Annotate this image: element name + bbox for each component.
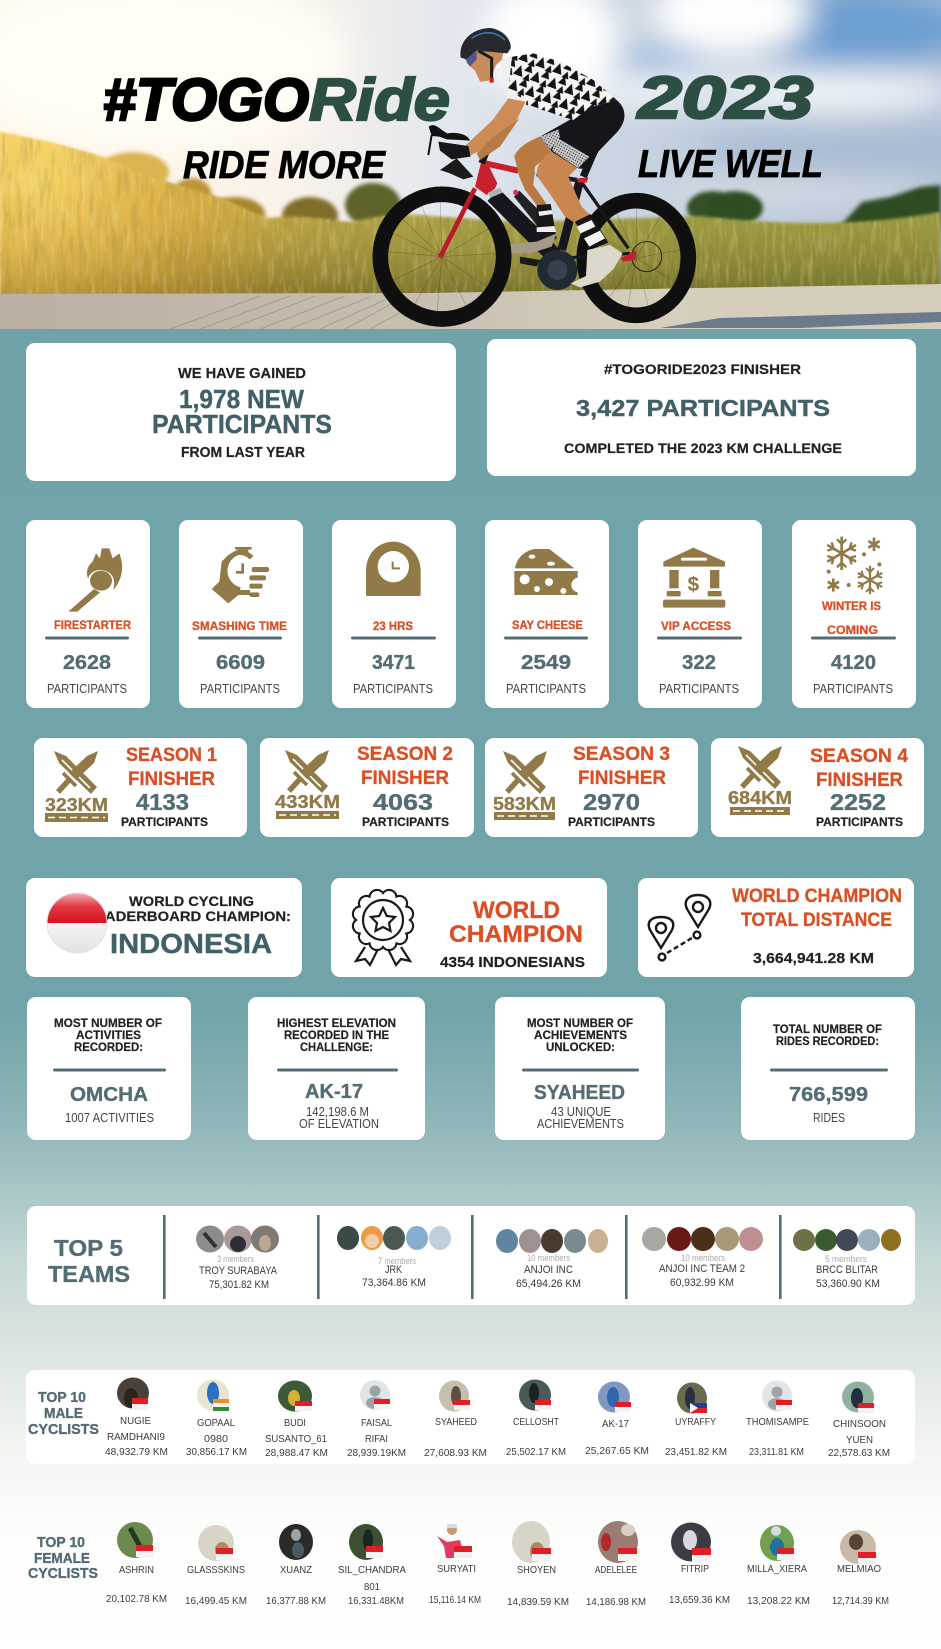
cyclist: suryati: SURYATI — [437, 1563, 476, 1575]
heading: SEASON 1 — [126, 744, 217, 766]
tagline: live well: LIVE WELL — [638, 143, 823, 186]
number: 4063 — [373, 789, 433, 815]
stat: 4354 indonesians: 4354 INDONESIANS — [440, 955, 585, 971]
heading — [810, 745, 908, 791]
title: 2023: 2023 — [637, 65, 813, 131]
heading: MOST NUMBER OF — [54, 1016, 162, 1030]
cyclist: budi susanto_61 — [265, 1380, 328, 1459]
panel: season 2 finisher — [260, 738, 474, 837]
cyclist: glassskins — [185, 1525, 247, 1607]
caption: PARTICIPANTS — [816, 815, 903, 829]
heading — [48, 1235, 130, 1287]
heading: FINISHER — [816, 769, 903, 791]
bottle — [514, 191, 545, 225]
heading: CYCLISTS — [28, 1566, 98, 1582]
heading — [28, 1390, 99, 1438]
cyclist: melmiao — [832, 1530, 889, 1607]
cyclist: milla_xiera — [747, 1525, 810, 1607]
number: 4120 — [831, 651, 876, 674]
crank — [537, 250, 577, 290]
panel: world champion total distance — [638, 878, 914, 977]
caption: PARTICIPANTS — [568, 815, 655, 829]
stat: 3,427 participants: 3,427 PARTICIPANTS — [576, 395, 830, 421]
label — [822, 599, 881, 637]
text: finisher heading: #TOGORIDE2023 FINISHER — [604, 361, 801, 377]
cyclist: thomisampe: THOMISAMPE — [746, 1416, 809, 1428]
heading: SEASON 4 — [810, 745, 908, 767]
heading: SEASON 2 — [357, 743, 453, 765]
panel: hero photo banner — [0, 0, 941, 329]
title: #TOGORide: #TOGO — [103, 67, 309, 133]
stat: omcha: OMCHA — [70, 1084, 148, 1106]
stat: 1,978 new participants: PARTICIPANTS — [152, 411, 332, 439]
cyclist: ashrin: 20,102.78 KM — [106, 1593, 167, 1605]
heading: TOP 10 — [38, 1390, 86, 1406]
caption — [299, 1105, 379, 1131]
cyclist: budi susanto_61: BUDI — [284, 1417, 306, 1429]
cyclist: gopaal 0980: 0980 — [204, 1433, 228, 1445]
team: troy surabaya: TROY SURABAYA — [199, 1265, 278, 1277]
icon: swords and road 323km: 323KM — [45, 795, 108, 815]
cyclist: suryati: 15,116.14 KM — [429, 1594, 481, 1606]
panel: season 4 finisher — [711, 738, 924, 837]
icon: swords and road 433km — [275, 750, 340, 819]
caption: RIDES — [813, 1111, 845, 1125]
cyclist: faisal rifai: 28,939.19KM — [347, 1447, 406, 1459]
cyclist: ashrin: ASHRIN — [119, 1564, 154, 1576]
cyclist: budi susanto_61: SUSANTO_61 — [265, 1433, 327, 1445]
stat: 1,978 new participants: 1,978 NEW — [179, 386, 305, 414]
number: 6609 — [216, 651, 265, 674]
team: jrk: JRK — [385, 1264, 403, 1276]
cyclist: faisal rifai: RIFAI — [365, 1433, 388, 1445]
label: COMING — [827, 623, 878, 637]
cyclist: nugie ramdhani9 — [105, 1378, 168, 1458]
cyclist: sil_chandra801: 801 — [364, 1581, 380, 1593]
team: brcc blitar: 53,360.90 KM — [816, 1278, 880, 1290]
label: WINTER IS — [822, 599, 881, 613]
cyclist: cellosht — [506, 1380, 566, 1458]
cyclist: ak-17: AK-17 — [602, 1418, 629, 1430]
label: FIRESTARTER — [54, 618, 131, 632]
panel: vip access — [638, 520, 762, 708]
cyclist: gopaal 0980: GOPAAL — [197, 1417, 235, 1429]
heading: CYCLISTS — [28, 1422, 99, 1438]
grass texture — [0, 132, 940, 294]
team: troy surabaya: 75,301.82 KM — [209, 1279, 269, 1291]
heading: CHAMPION — [449, 921, 583, 948]
panel: highest elevation — [248, 997, 425, 1140]
team: anjoi inc: 65,494.26 KM — [516, 1278, 581, 1290]
cyclist and bike — [380, 28, 688, 319]
cyclist: chinsoon yuen: 22,578.63 KM — [828, 1447, 890, 1459]
number: 3471 — [372, 651, 415, 674]
heading — [357, 743, 453, 789]
cyclist: budi susanto_61: 28,988.47 KM — [265, 1447, 328, 1459]
caption: PARTICIPANTS — [813, 682, 893, 696]
icon: stopwatch in hand — [212, 547, 269, 603]
stat: syaheed: SYAHEED — [534, 1082, 625, 1104]
heading — [28, 1535, 98, 1582]
panel: leaderboard champion — [26, 878, 302, 977]
number: 322 — [682, 651, 716, 674]
cyclist: gopaal 0980 — [186, 1380, 247, 1458]
cyclist: shoyen — [507, 1521, 569, 1608]
heading: MALE — [44, 1406, 83, 1422]
icon: swords and road 323km — [45, 751, 108, 822]
caption: 1007 ACTIVITIES — [65, 1111, 154, 1125]
icon: burning match — [68, 548, 122, 612]
cyclist: nugie ramdhani9: 48,932.79 KM — [105, 1446, 168, 1458]
cyclist: nugie ramdhani9: RAMDHANI9 — [107, 1431, 165, 1443]
cyclist: sil_chandra801 — [338, 1524, 406, 1607]
caption: PARTICIPANTS — [121, 815, 208, 829]
panel: top 10 female cyclists — [28, 1521, 889, 1608]
icon: award medal — [353, 890, 413, 965]
icon: bank — [663, 548, 725, 608]
cyclist: suryati — [429, 1524, 481, 1606]
heading: RECORDED IN THE — [284, 1028, 389, 1042]
title: #TOGORide: Ride — [309, 67, 450, 133]
frame — [440, 153, 630, 258]
tagline: ride more: RIDE MORE — [183, 144, 386, 187]
heading: WORLD — [473, 897, 560, 924]
caption: OF ELEVATION — [299, 1117, 379, 1131]
heading: TEAMS — [48, 1261, 130, 1287]
team: troy surabaya: 3 members — [217, 1254, 254, 1264]
caption — [537, 1105, 624, 1131]
grass field — [0, 132, 941, 296]
cyclist: adelelee: 14,186.98 KM — [586, 1596, 646, 1608]
caption: PARTICIPANTS — [659, 682, 739, 696]
heading: WORLD CHAMPION — [732, 886, 902, 907]
heading: TOP 10 — [37, 1535, 85, 1551]
icon: indonesia flag sphere — [47, 893, 107, 953]
heading: SEASON 3 — [573, 743, 670, 765]
cyclist: melmiao: 12,714.39 KM — [832, 1595, 889, 1607]
label: VIP ACCESS — [661, 619, 731, 633]
number: 2628 — [63, 651, 111, 674]
cyclist: xuanz — [266, 1524, 326, 1607]
cyclist: nugie ramdhani9: NUGIE — [120, 1415, 151, 1427]
panel: top 10 male cyclists — [26, 1370, 915, 1464]
cyclist: cellosht: 25,502.17 KM — [506, 1446, 566, 1458]
cyclist: glassskins: 16,499.45 KM — [185, 1595, 247, 1607]
cyclist: melmiao: MELMIAO — [837, 1563, 881, 1575]
cyclist: ak-17: 25,267.65 KM — [585, 1445, 649, 1457]
heading: CHALLENGE: — [300, 1040, 373, 1054]
team: anjoi inc: 10 members — [527, 1253, 570, 1263]
caption: PARTICIPANTS — [47, 682, 127, 696]
cyclist: gopaal 0980: 30,856.17 KM — [186, 1446, 247, 1458]
cyclist: uyraffy: 23,451.82 KM — [665, 1446, 727, 1458]
heading: TOTAL DISTANCE — [741, 910, 892, 931]
team: anjoi inc team 2: 10 members — [681, 1253, 725, 1263]
panel: world champion — [331, 878, 607, 977]
panel: 23 hrs — [332, 520, 456, 708]
cyclist: milla_xiera: 13,208.22 KM — [747, 1595, 810, 1607]
text: from last year: FROM LAST YEAR — [181, 445, 306, 461]
team: jrk — [337, 1226, 451, 1289]
panel: finishers — [487, 339, 916, 476]
team: anjoi inc team 2: ANJOI INC TEAM 2 — [659, 1263, 745, 1275]
cyclist: thomisampe: 23,311.81 KM — [749, 1446, 804, 1458]
road — [0, 284, 941, 329]
icon: swords and road 583km: 583KM — [493, 794, 556, 814]
heading — [527, 1016, 633, 1054]
text: we have gained: WE HAVE GAINED — [178, 366, 306, 382]
cyclist: sil_chandra801: SIL_CHANDRA — [338, 1564, 406, 1576]
background trees — [97, 152, 941, 235]
team: anjoi inc — [496, 1229, 608, 1290]
panel: say cheese — [485, 520, 609, 708]
cyclist: shoyen: SHOYEN — [517, 1564, 556, 1576]
heading — [54, 1016, 162, 1054]
jersey — [502, 53, 617, 120]
team: anjoi inc: ANJOI INC — [524, 1264, 573, 1276]
caption: PARTICIPANTS — [353, 682, 433, 696]
icon: swords and road 433km: 433KM — [275, 792, 340, 812]
cyclist: uyraffy — [665, 1382, 727, 1458]
heading — [277, 1016, 396, 1054]
cyclist: xuanz: XUANZ — [280, 1564, 313, 1576]
caption: PARTICIPANTS — [200, 682, 280, 696]
number: 2970 — [583, 789, 640, 815]
cyclist: fitrip: FITRIP — [681, 1563, 709, 1575]
cyclist: shoyen: 14,839.59 KM — [507, 1596, 569, 1608]
number: 2549 — [521, 651, 571, 674]
cyclist: fitrip — [669, 1522, 730, 1606]
heading: FINISHER — [361, 767, 449, 789]
head — [466, 49, 504, 82]
cyclist: sil_chandra801: 16,331.48KM — [348, 1595, 404, 1607]
panel: new participants — [26, 343, 456, 481]
icon: swords and road 684km — [728, 746, 792, 815]
heading: FINISHER — [578, 767, 666, 789]
heading: MOST NUMBER OF — [527, 1016, 633, 1030]
handlebar and gloves — [429, 125, 470, 141]
cyclist: chinsoon yuen: CHINSOON — [833, 1418, 886, 1430]
panel: total rides — [741, 997, 915, 1140]
helmet — [460, 28, 511, 59]
cyclist: glassskins: GLASSSKINS — [187, 1564, 245, 1576]
cyclist: fitrip: 13,659.36 KM — [669, 1594, 730, 1606]
panel: top 5 teams — [27, 1206, 915, 1305]
icon: swords and road 684km: 684KM — [728, 788, 792, 808]
team: brcc blitar — [793, 1229, 901, 1290]
icon: snowflakes — [827, 537, 882, 594]
cyclist: ak-17 — [585, 1382, 649, 1457]
heading: ACHIEVEMENTS — [534, 1028, 627, 1042]
team: anjoi inc team 2 — [642, 1227, 763, 1289]
stat: ak-17: AK-17 — [305, 1081, 363, 1103]
caption: 43 UNIQUE — [551, 1105, 611, 1119]
rear wheel — [584, 201, 688, 315]
panel: most achievements — [495, 997, 665, 1140]
label: 23 HRS — [373, 619, 413, 633]
panel: winter is coming — [792, 520, 916, 708]
cyclist: chinsoon yuen — [828, 1382, 890, 1459]
label: SMASHING TIME — [192, 619, 287, 633]
icon: route pins — [649, 895, 710, 960]
number: 2252 — [830, 789, 886, 815]
panel: firestarter — [26, 520, 150, 708]
far leg — [514, 137, 552, 207]
cyclist: adelelee: ADELELEE — [595, 1564, 637, 1576]
text: completed challenge: COMPLETED THE 2023 KM CHALLENGE — [564, 440, 842, 456]
caption: PARTICIPANTS — [506, 682, 586, 696]
panel: most activities — [27, 997, 191, 1140]
arms — [466, 98, 526, 155]
heading: FEMALE — [34, 1551, 90, 1567]
heading: UNLOCKED: — [546, 1040, 615, 1054]
team: anjoi inc team 2: 60,932.99 KM — [670, 1277, 734, 1289]
heading: TOP 5 — [54, 1235, 123, 1261]
caption: ACHIEVEMENTS — [537, 1117, 624, 1131]
heading: HIGHEST ELEVATION — [277, 1016, 396, 1030]
heading — [773, 1022, 882, 1048]
panel: season 1 finisher — [34, 738, 247, 837]
heading: RIDES RECORDED: — [776, 1034, 879, 1048]
heading: ACTIVITIES — [76, 1028, 141, 1042]
team: brcc blitar: BRCC BLITAR — [816, 1264, 878, 1276]
shorts — [540, 100, 624, 169]
label: SAY CHEESE — [512, 618, 583, 632]
stat: total km: 3,664,941.28 KM — [753, 951, 874, 967]
heading — [732, 886, 902, 931]
cyclist: xuanz: 16,377.88 KM — [266, 1595, 326, 1607]
caption: PARTICIPANTS — [362, 815, 449, 829]
team: brcc blitar: 5 members — [825, 1254, 867, 1264]
icon: mantel clock — [366, 542, 421, 596]
caption: 142,198.6 M — [306, 1105, 369, 1119]
heading — [449, 897, 583, 948]
front wheel — [380, 194, 504, 319]
heading: LEADERBOARD CHAMPION: — [86, 908, 291, 924]
cyclist: milla_xiera: MILLA_XIERA — [747, 1563, 807, 1575]
team: jrk: 73,364.86 KM — [362, 1277, 426, 1289]
number: 4133 — [136, 789, 189, 815]
icon: cheese — [514, 549, 586, 595]
cyclist: thomisampe — [746, 1380, 809, 1458]
panel: season 3 finisher — [485, 738, 698, 837]
cyclist: syaheed — [424, 1380, 487, 1459]
heading — [126, 744, 217, 790]
panel: smashing time — [179, 520, 303, 708]
cyclist: faisal rifai: FAISAL — [361, 1417, 392, 1429]
near leg — [537, 152, 592, 224]
team: jrk: 7 members — [378, 1256, 416, 1266]
team: troy surabaya — [196, 1226, 279, 1291]
heading — [86, 893, 291, 924]
cyclist: ashrin — [106, 1522, 167, 1605]
heading — [573, 743, 670, 789]
cyclist: syaheed: 27,608.93 KM — [424, 1447, 487, 1459]
cyclist: chinsoon yuen: YUEN — [846, 1434, 873, 1446]
stat: indonesia: INDONESIA — [110, 928, 272, 959]
icon: bank: $ — [688, 573, 700, 596]
stat: 766,599: 766,599 — [789, 1084, 868, 1106]
heading: RECORDED: — [74, 1040, 143, 1054]
cyclist: uyraffy: UYRAFFY — [675, 1416, 716, 1428]
cyclist: faisal rifai — [347, 1380, 406, 1459]
cyclist: adelelee — [586, 1521, 646, 1608]
heading: FINISHER — [128, 768, 215, 790]
heading: WORLD CYCLING — [129, 893, 254, 909]
title: #TOGORide — [103, 67, 450, 133]
stat: 1,978 new participants — [152, 386, 332, 439]
cyclist: cellosht: CELLOSHT — [513, 1416, 559, 1428]
cyclist: syaheed: SYAHEED — [435, 1416, 477, 1428]
icon: swords and road 583km — [493, 751, 556, 820]
heading: TOTAL NUMBER OF — [773, 1022, 882, 1036]
